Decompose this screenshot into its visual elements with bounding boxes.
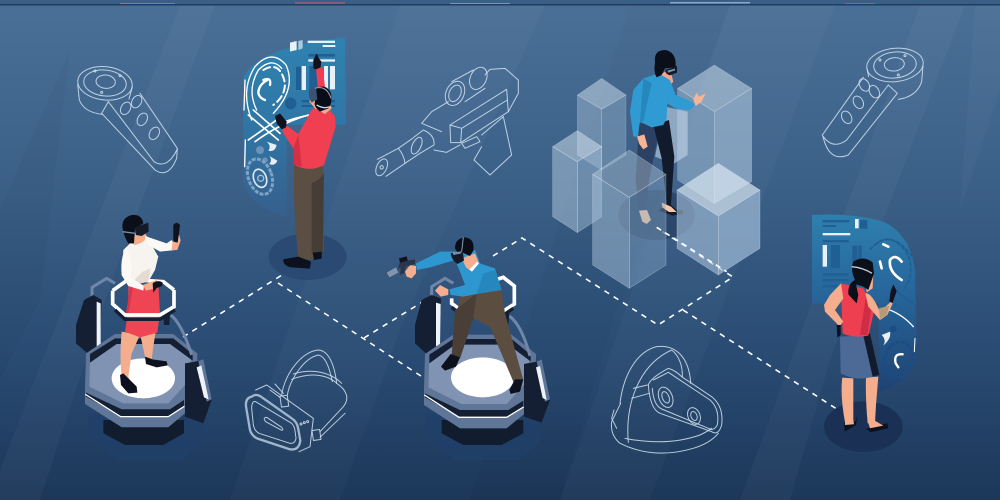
icon: blaster outline <box>373 64 518 178</box>
VR treadmill platform with woman <box>76 215 212 460</box>
cube front right <box>677 163 760 275</box>
platform base <box>442 420 523 445</box>
glass cubes and VR user <box>553 50 760 288</box>
left pillar <box>76 278 115 354</box>
floor shadow <box>824 401 903 452</box>
icon: VR controller outline left <box>76 64 177 173</box>
right pillar <box>171 315 212 423</box>
person: man in red shirt <box>275 53 336 269</box>
standing disc <box>451 357 514 397</box>
standing disc <box>112 358 175 398</box>
ring back <box>113 279 174 291</box>
curved screen <box>812 214 917 392</box>
person: woman with ponytail <box>824 258 897 432</box>
holographic screen and woman in red top <box>812 214 917 452</box>
platform shadow <box>88 413 203 460</box>
person: man in blue sweater <box>387 237 523 394</box>
cube back right <box>678 65 752 203</box>
interface graphics <box>823 219 917 381</box>
platform base <box>103 420 184 445</box>
floor shadow <box>618 190 695 240</box>
cube small behind user <box>655 107 688 164</box>
right pillar <box>509 316 550 423</box>
curved screen <box>243 37 346 217</box>
person: woman in blue sweater <box>630 50 706 224</box>
icon: VR headset outline right <box>611 346 722 453</box>
cube front left <box>553 131 602 233</box>
icon: VR controller outline right <box>822 45 925 157</box>
waist ring <box>113 290 174 315</box>
person: woman in white blouse <box>113 215 181 393</box>
dashed connection paths <box>183 228 843 413</box>
interface graphics <box>243 40 335 198</box>
cube front centre <box>593 150 666 288</box>
left pillar <box>415 278 453 354</box>
cube back left <box>577 78 626 170</box>
platform shadow <box>425 413 542 460</box>
icon: VR headset outline left <box>246 350 347 452</box>
holographic screen and man in red <box>243 37 347 280</box>
dashes over cube <box>657 227 727 272</box>
blaster <box>387 256 415 277</box>
floor shadow <box>269 233 347 280</box>
VR treadmill platform with man <box>387 237 550 460</box>
